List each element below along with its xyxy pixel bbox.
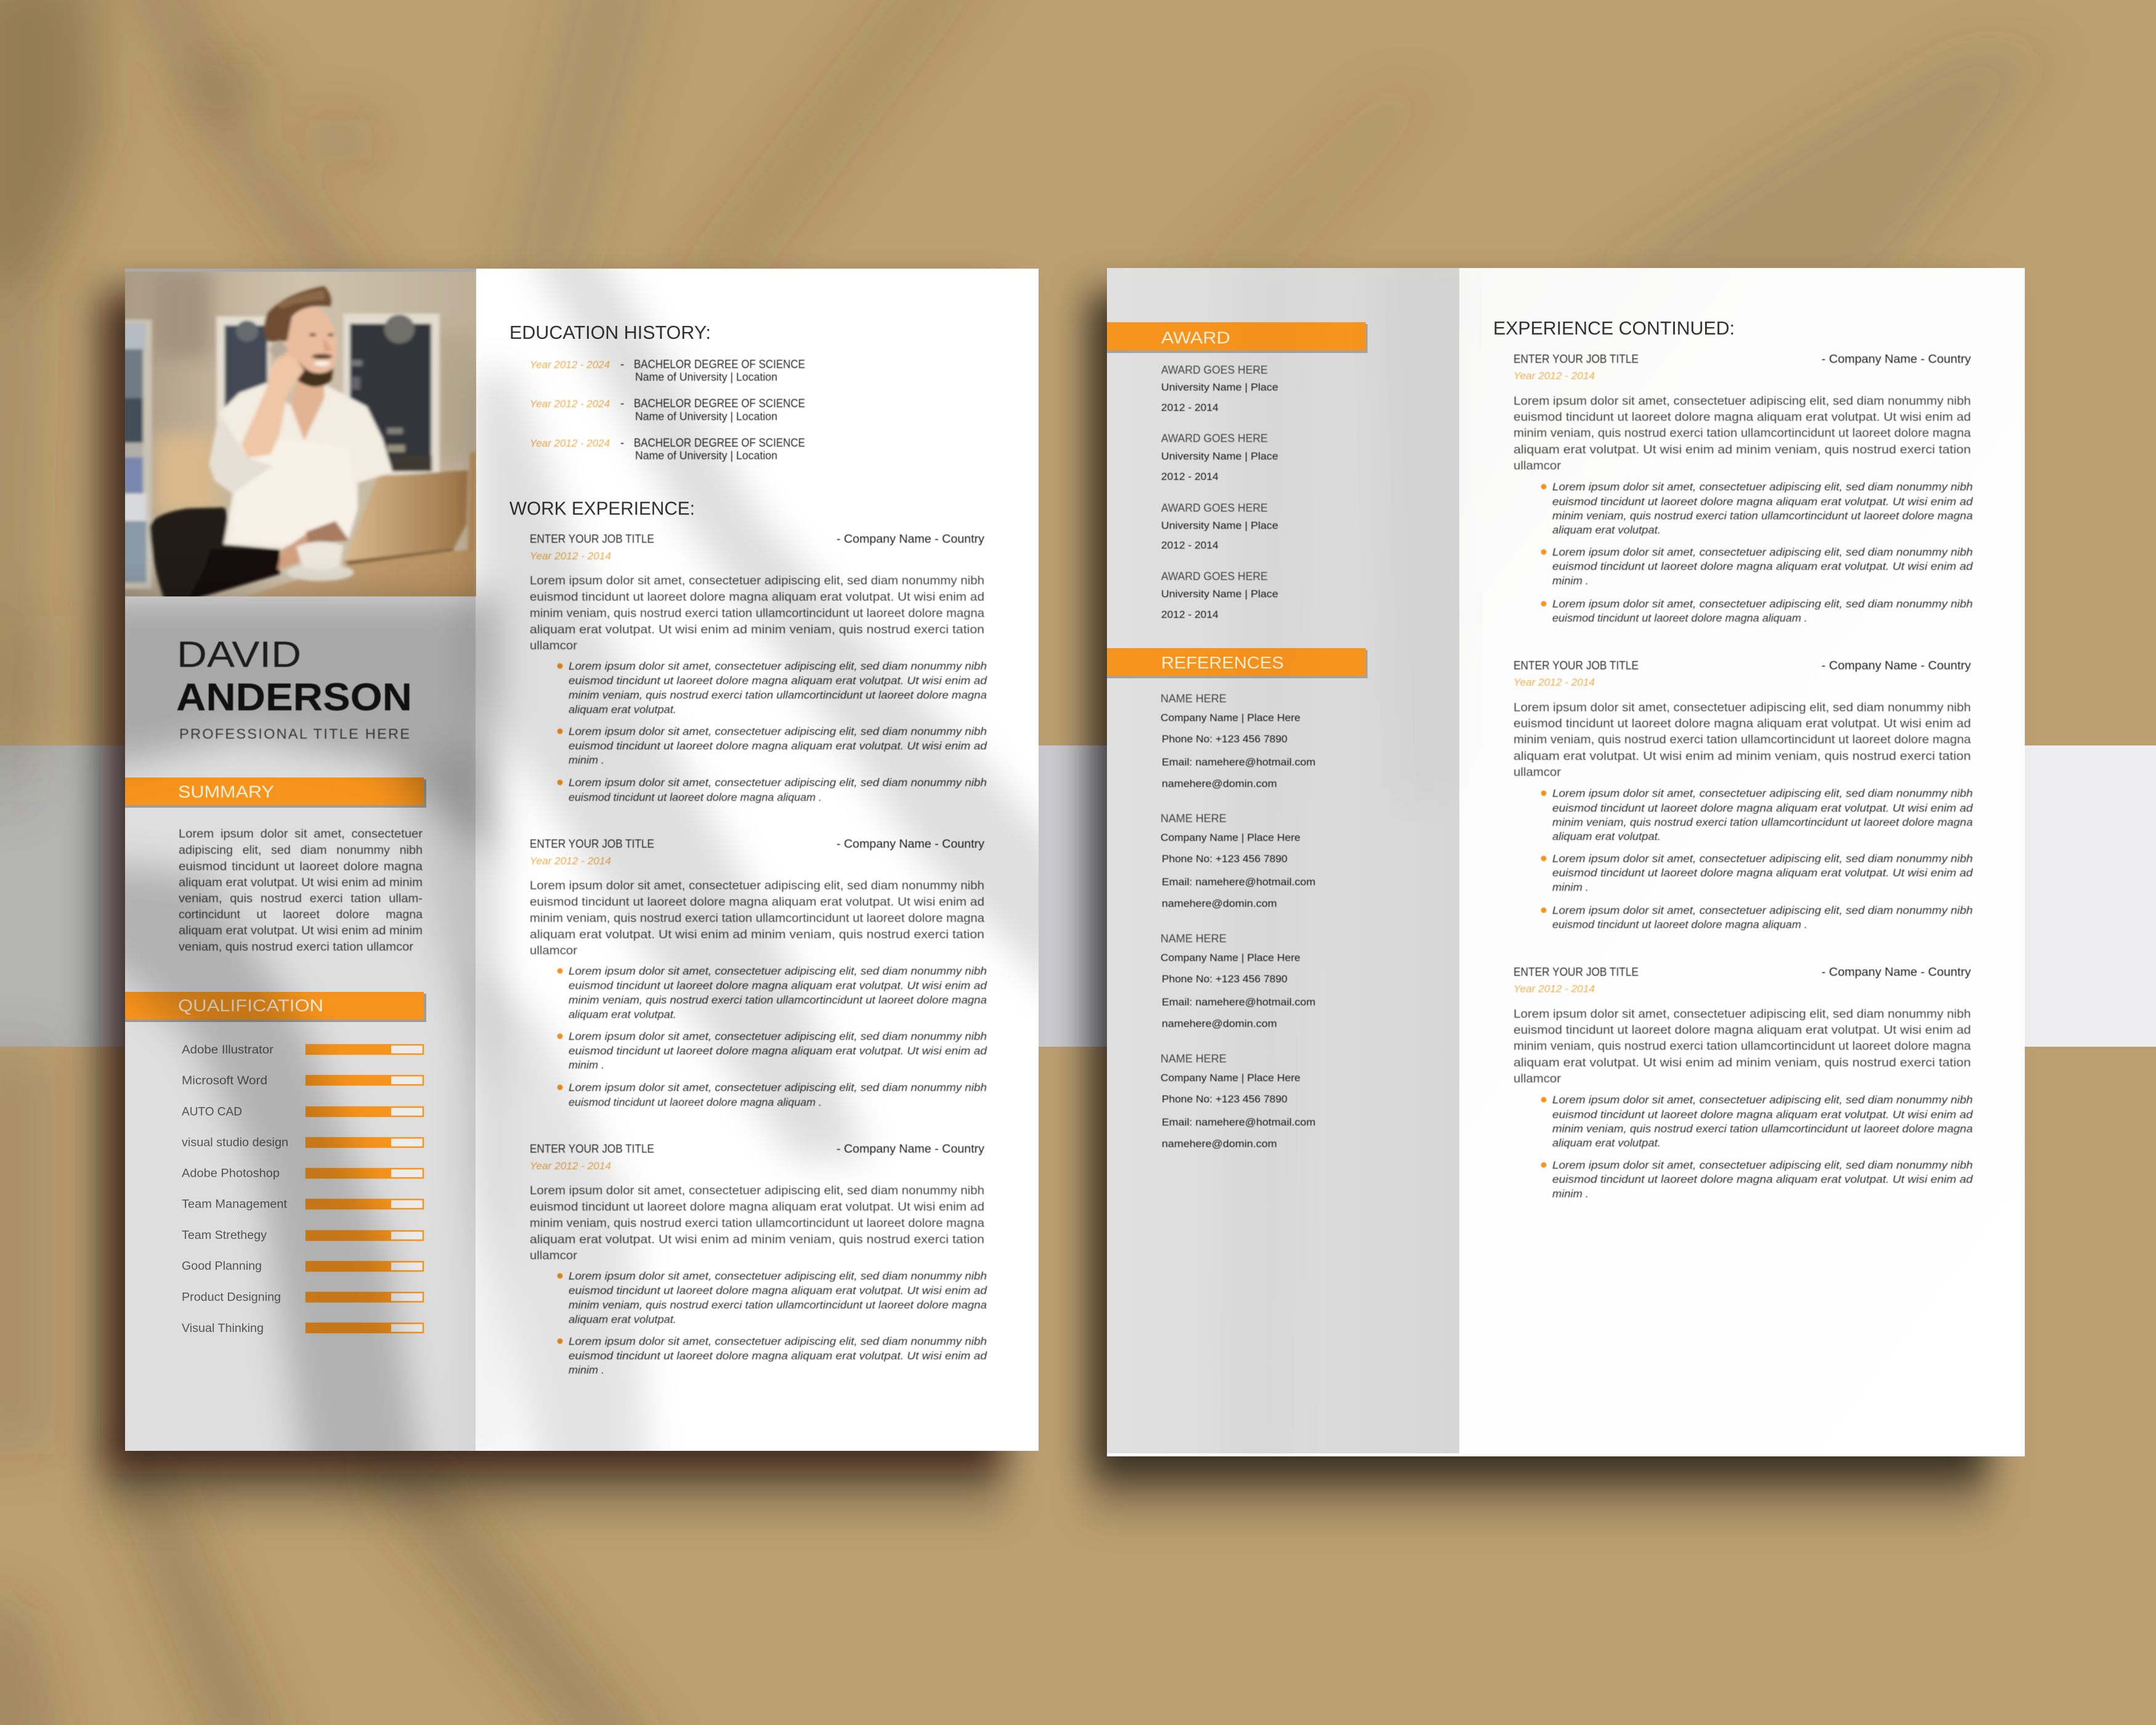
job entry 1	[530, 533, 987, 803]
job entry 5: - Company Name - Country	[1822, 659, 1971, 673]
job entry 2: ENTER YOUR JOB TITLE	[530, 838, 654, 851]
job entry 4: euismod tincidunt ut laoreet dolore magna aliquam erat volutpat. Ut wisi enim ad	[1552, 560, 1974, 572]
job entry 5: Year 2012 - 2014	[1514, 676, 1595, 688]
job entry 4: Lorem ipsum dolor sit amet, consectetuer adipiscing elit, sed diam nonummy nibh	[1552, 481, 1972, 493]
award entries: AWARD GOES HERE	[1161, 570, 1268, 583]
job entry 6: Year 2012 - 2014	[1514, 983, 1595, 995]
job entry 3: Lorem ipsum dolor sit amet, consectetuer adipiscing elit, sed diam nonummy nibh	[530, 1184, 984, 1198]
reference entries: namehere@domin.com	[1162, 1018, 1277, 1029]
award entries: AWARD GOES HERE	[1161, 363, 1268, 376]
education entries	[530, 357, 805, 462]
job entry 1: aliquam erat volutpat.	[569, 704, 676, 716]
job entry 1: euismod tincidunt ut laoreet dolore magna aliquam .	[569, 791, 822, 803]
job entry 2: - Company Name - Country	[837, 838, 985, 851]
award entries: University Name | Place	[1161, 589, 1278, 600]
summary text: euismod tincidunt ut laoreet dolore magna	[179, 859, 423, 873]
reference entries: Company Name | Place Here	[1161, 952, 1300, 964]
job entry 2: Lorem ipsum dolor sit amet, consectetuer adipiscing elit, sed diam nonummy nibh	[569, 1081, 987, 1094]
job entry 6: Lorem ipsum dolor sit amet, consectetuer adipiscing elit, sed diam nonummy nibh	[1552, 1159, 1972, 1171]
job entry 3: - Company Name - Country	[837, 1143, 985, 1156]
job entry 3: Lorem ipsum dolor sit amet, consectetuer adipiscing elit, sed diam nonummy nibh	[569, 1335, 987, 1347]
award entries: 2012 - 2014	[1161, 471, 1218, 482]
job entry 1: minim .	[569, 754, 604, 766]
job entry 4: euismod tincidunt ut laoreet dolore magna aliquam .	[1552, 612, 1807, 624]
section bar: award: AWARD	[1161, 328, 1230, 347]
reference entries: Company Name | Place Here	[1161, 712, 1300, 723]
job entry 3: ENTER YOUR JOB TITLE	[530, 1143, 654, 1156]
job entry 1: Lorem ipsum dolor sit amet, consectetuer adipiscing elit, sed diam nonummy nibh	[569, 725, 987, 737]
award entries: University Name | Place	[1161, 382, 1278, 393]
job entry 2: aliquam erat volutpat.	[569, 1008, 676, 1020]
job entry 2: Year 2012 - 2014	[530, 855, 611, 867]
section bar: summary	[125, 777, 426, 808]
summary text: veniam, quis nostrud exerci tation ullam-	[179, 891, 423, 905]
reference entries: Company Name | Place Here	[1161, 1073, 1300, 1084]
job entry 6: aliquam erat volutpat.	[1552, 1137, 1661, 1149]
job entry 3: Lorem ipsum dolor sit amet, consectetuer adipiscing elit, sed diam nonummy nibh	[569, 1270, 987, 1282]
reference entries	[1161, 692, 1316, 1150]
job entry 4: Year 2012 - 2014	[1514, 370, 1595, 382]
skill: Microsoft Word: Microsoft Word	[182, 1074, 267, 1087]
job entry 5: Lorem ipsum dolor sit amet, consectetuer adipiscing elit, sed diam nonummy nibh	[1552, 904, 1972, 917]
reference entries: namehere@domin.com	[1162, 1138, 1277, 1150]
job entry 5: euismod tincidunt ut laoreet dolore magna aliquam erat volutpat. Ut wisi enim ad	[1552, 802, 1974, 814]
job entry 1: Lorem ipsum dolor sit amet, consectetuer adipiscing elit, sed diam nonummy nibh	[569, 660, 987, 672]
award entries: AWARD GOES HERE	[1161, 432, 1268, 445]
summary text	[179, 827, 423, 954]
reference entries: Email: namehere@hotmail.com	[1162, 757, 1316, 768]
job entry 4: minim veniam, quis nostrud exerci tation ullamcortincidunt ut laoreet dolore magna	[1552, 509, 1973, 522]
section bar: references: REFERENCES	[1161, 653, 1284, 672]
job entry 3: euismod tincidunt ut laoreet dolore magna aliquam erat volutpat. Ut wisi enim ad	[569, 1349, 987, 1362]
summary text: Lorem ipsum dolor sit amet, consectetuer	[179, 827, 423, 840]
window-light shadows across page one	[125, 269, 1039, 1451]
job entry 2: minim .	[569, 1058, 604, 1071]
job entry 6: ENTER YOUR JOB TITLE	[1514, 966, 1639, 979]
reference entries: namehere@domin.com	[1162, 898, 1277, 909]
panel: resume page two	[1107, 259, 2025, 1479]
job entry 4: minim veniam, quis nostrud exerci tation ullamcortincidunt ut laoreet dolore magna	[1514, 426, 1971, 440]
reference entries: NAME HERE	[1161, 933, 1226, 945]
job entry 5: minim veniam, quis nostrud exerci tation ullamcortincidunt ut laoreet dolore magna	[1514, 733, 1971, 747]
job entry 4: euismod tincidunt ut laoreet dolore magna aliquam erat volutpat. Ut wisi enim ad	[1552, 495, 1974, 508]
education entries: Year 2012 - 2024	[530, 437, 610, 449]
award entries: 2012 - 2014	[1161, 540, 1218, 551]
job entry 2: minim veniam, quis nostrud exerci tation ullamcortincidunt ut laoreet dolore magna	[569, 994, 987, 1006]
job entry 2: minim veniam, quis nostrud exerci tation ullamcortincidunt ut laoreet dolore magna	[530, 912, 984, 925]
reference entries: Email: namehere@hotmail.com	[1162, 997, 1316, 1008]
photo: man on the phone at a laptop	[121, 269, 484, 604]
job entry 3: ullamcor	[530, 1249, 578, 1262]
job entry 6: Lorem ipsum dolor sit amet, consectetuer adipiscing elit, sed diam nonummy nibh	[1514, 1007, 1971, 1021]
job entry 6: minim .	[1552, 1188, 1589, 1200]
skill: Visual Thinking: Visual Thinking	[182, 1322, 264, 1335]
skill: Team Strethegy	[182, 1229, 423, 1242]
reference entries: Company Name | Place Here	[1161, 832, 1300, 843]
job entry 2: Lorem ipsum dolor sit amet, consectetuer adipiscing elit, sed diam nonummy nibh	[530, 879, 984, 893]
job entry 6: minim veniam, quis nostrud exerci tation ullamcortincidunt ut laoreet dolore magna	[1552, 1122, 1973, 1135]
education entries: Year 2012 - 2024	[530, 359, 610, 371]
job entry 1: ENTER YOUR JOB TITLE	[530, 533, 654, 546]
skill: Product Designing	[182, 1291, 423, 1304]
job entry 6	[1514, 966, 1974, 1200]
summary text: cortincidunt ut laoreet dolore magna	[179, 907, 423, 921]
page two white column	[1107, 268, 2025, 1456]
job entry 1: Lorem ipsum dolor sit amet, consectetuer adipiscing elit, sed diam nonummy nibh	[569, 776, 987, 789]
job entry 1: - Company Name - Country	[837, 533, 985, 546]
skill: Adobe Photoshop: Adobe Photoshop	[182, 1167, 280, 1180]
education entries: -	[620, 437, 624, 450]
page one grey sidebar	[125, 269, 476, 1451]
job entry 4: Lorem ipsum dolor sit amet, consectetuer adipiscing elit, sed diam nonummy nibh	[1552, 598, 1972, 610]
reference entries: Phone No: +123 456 7890	[1162, 734, 1287, 745]
job entry 3	[530, 1143, 987, 1376]
reference entries: NAME HERE	[1161, 813, 1226, 825]
skill: Good Planning	[182, 1260, 423, 1273]
job entry 1: Lorem ipsum dolor sit amet, consectetuer adipiscing elit, sed diam nonummy nibh	[530, 574, 984, 588]
skill list with progress bars	[182, 1044, 423, 1335]
reference entries: Phone No: +123 456 7890	[1162, 1094, 1287, 1105]
job entry 5: euismod tincidunt ut laoreet dolore magna aliquam erat volutpat. Ut wisi enim ad	[1514, 717, 1971, 731]
job entry 2: euismod tincidunt ut laoreet dolore magna aliquam erat volutpat. Ut wisi enim ad	[530, 895, 984, 909]
job entry 2: aliquam erat volutpat. Ut wisi enim ad minim veniam, quis nostrud exerci tation	[530, 928, 984, 941]
award entries: 2012 - 2014	[1161, 609, 1218, 620]
candidate name and title	[176, 635, 412, 742]
education entries: BACHELOR DEGREE OF SCIENCE	[634, 397, 805, 410]
skill: visual studio design	[182, 1136, 423, 1150]
skill: Adobe Illustrator: Adobe Illustrator	[182, 1044, 274, 1057]
education entries: BACHELOR DEGREE OF SCIENCE	[634, 357, 805, 371]
job entry 3: euismod tincidunt ut laoreet dolore magna aliquam erat volutpat. Ut wisi enim ad	[569, 1284, 987, 1296]
page one white column	[125, 269, 1039, 1451]
education entries: Year 2012 - 2024	[530, 398, 610, 410]
drop shadows under the pages	[102, 293, 1988, 1516]
job entry 4: aliquam erat volutpat.	[1552, 524, 1661, 536]
job entry 5: ENTER YOUR JOB TITLE	[1514, 659, 1639, 673]
job entry 2: Lorem ipsum dolor sit amet, consectetuer adipiscing elit, sed diam nonummy nibh	[569, 965, 987, 977]
reference entries: Phone No: +123 456 7890	[1162, 973, 1287, 984]
job entry 5: Lorem ipsum dolor sit amet, consectetuer adipiscing elit, sed diam nonummy nibh	[1514, 701, 1971, 715]
job entry 1: minim veniam, quis nostrud exerci tation ullamcortincidunt ut laoreet dolore magna	[530, 606, 984, 620]
skill: Team Strethegy: Team Strethegy	[182, 1229, 267, 1242]
reference entries: NAME HERE	[1161, 1052, 1226, 1065]
job entry 4: Lorem ipsum dolor sit amet, consectetuer adipiscing elit, sed diam nonummy nibh	[1552, 546, 1972, 558]
job entry 2: Lorem ipsum dolor sit amet, consectetuer adipiscing elit, sed diam nonummy nibh	[569, 1030, 987, 1042]
skill: Team Management	[182, 1198, 423, 1211]
section bar: references	[1107, 648, 1368, 678]
job entry 1: euismod tincidunt ut laoreet dolore magna aliquam erat volutpat. Ut wisi enim ad	[569, 739, 987, 752]
candidate name and title: PROFESSIONAL TITLE HERE	[179, 726, 410, 742]
job entry 5: aliquam erat volutpat. Ut wisi enim ad minim veniam, quis nostrud exerci tation	[1514, 749, 1971, 763]
job entry 1: Year 2012 - 2014	[530, 550, 611, 562]
job entry 6: euismod tincidunt ut laoreet dolore magna aliquam erat volutpat. Ut wisi enim ad	[1552, 1173, 1974, 1185]
job entry 5: ullamcor	[1514, 765, 1562, 779]
job entry 2: euismod tincidunt ut laoreet dolore magna aliquam .	[569, 1096, 822, 1108]
job entry 4: euismod tincidunt ut laoreet dolore magna aliquam erat volutpat. Ut wisi enim ad	[1514, 410, 1971, 424]
job entry 2: ullamcor	[530, 944, 578, 957]
skill: Good Planning: Good Planning	[182, 1260, 262, 1273]
job entry 6: euismod tincidunt ut laoreet dolore magna aliquam erat volutpat. Ut wisi enim ad	[1514, 1023, 1971, 1037]
education entries: Name of University | Location	[635, 371, 777, 383]
job entry 5: Lorem ipsum dolor sit amet, consectetuer adipiscing elit, sed diam nonummy nibh	[1552, 787, 1972, 800]
job entry 6: aliquam erat volutpat. Ut wisi enim ad minim veniam, quis nostrud exerci tation	[1514, 1056, 1971, 1070]
job entry 4	[1514, 353, 1974, 624]
skill: visual studio design: visual studio design	[182, 1136, 288, 1150]
heading: work experience: WORK EXPERIENCE:	[509, 498, 695, 519]
job entry 5	[1514, 659, 1974, 930]
award entries: University Name | Place	[1161, 451, 1278, 462]
job entry 1: minim veniam, quis nostrud exerci tation ullamcortincidunt ut laoreet dolore magna	[569, 689, 987, 701]
job entry 1: ullamcor	[530, 639, 578, 652]
job entry 3: aliquam erat volutpat. Ut wisi enim ad minim veniam, quis nostrud exerci tation	[530, 1233, 984, 1246]
section bar: award	[1107, 322, 1368, 353]
summary text: veniam, quis nostrud exerci tation ullamcor	[179, 940, 414, 954]
skill: AUTO CAD: AUTO CAD	[182, 1105, 242, 1119]
heading: education history: EDUCATION HISTORY:	[509, 322, 711, 343]
job entry 1: euismod tincidunt ut laoreet dolore magna aliquam erat volutpat. Ut wisi enim ad	[569, 674, 987, 686]
heading: experience continued: EXPERIENCE CONTINUED:	[1493, 317, 1735, 339]
reference entries: Email: namehere@hotmail.com	[1162, 877, 1316, 888]
faint shadows across page two	[1220, 259, 1459, 1479]
job entry 4: - Company Name - Country	[1822, 353, 1971, 366]
job entry 6: Lorem ipsum dolor sit amet, consectetuer adipiscing elit, sed diam nonummy nibh	[1552, 1094, 1972, 1106]
job entry 4: aliquam erat volutpat. Ut wisi enim ad minim veniam, quis nostrud exerci tation	[1514, 443, 1971, 457]
summary text: adipiscing elit, sed diam nonummy nibh	[179, 843, 423, 857]
job entry 5: aliquam erat volutpat.	[1552, 830, 1661, 843]
skill: Product Designing: Product Designing	[182, 1291, 281, 1304]
section bar: summary: SUMMARY	[178, 782, 274, 801]
reference entries: namehere@domin.com	[1162, 779, 1277, 790]
skill: Visual Thinking	[182, 1322, 423, 1335]
job entry 4: minim .	[1552, 574, 1589, 586]
award entries	[1161, 363, 1278, 620]
job entry 2: euismod tincidunt ut laoreet dolore magna aliquam erat volutpat. Ut wisi enim ad	[569, 1045, 987, 1057]
education entries: Name of University | Location	[635, 410, 777, 423]
skill: Adobe Illustrator	[182, 1044, 423, 1057]
job entry 4: ENTER YOUR JOB TITLE	[1514, 353, 1639, 366]
education entries: BACHELOR DEGREE OF SCIENCE	[634, 436, 805, 450]
job entry 5: euismod tincidunt ut laoreet dolore magna aliquam erat volutpat. Ut wisi enim ad	[1552, 866, 1974, 879]
summary text: aliquam erat volutpat. Ut wisi enim ad minim	[179, 875, 423, 889]
job entry 6: euismod tincidunt ut laoreet dolore magna aliquam erat volutpat. Ut wisi enim ad	[1552, 1108, 1974, 1121]
panel: resume page one	[125, 269, 1039, 1451]
background: white horizontal band	[0, 745, 2156, 1047]
candidate name and title: DAVID	[177, 635, 301, 675]
skill: Adobe Photoshop	[182, 1167, 423, 1180]
skill: AUTO CAD	[182, 1105, 423, 1119]
skill: Team Management: Team Management	[182, 1198, 288, 1211]
reference entries: Phone No: +123 456 7890	[1162, 854, 1287, 865]
section bar: qualification: QUALIFICATION	[178, 996, 323, 1015]
job entry 3: euismod tincidunt ut laoreet dolore magna aliquam erat volutpat. Ut wisi enim ad	[530, 1200, 984, 1214]
job entry 2: euismod tincidunt ut laoreet dolore magna aliquam erat volutpat. Ut wisi enim ad	[569, 980, 987, 992]
job entry 1: euismod tincidunt ut laoreet dolore magna aliquam erat volutpat. Ut wisi enim ad	[530, 590, 984, 604]
job entry 6: minim veniam, quis nostrud exerci tation ullamcortincidunt ut laoreet dolore magna	[1514, 1039, 1971, 1053]
job entry 6: - Company Name - Country	[1822, 966, 1971, 979]
job entry 3: minim veniam, quis nostrud exerci tation ullamcortincidunt ut laoreet dolore magna	[530, 1216, 984, 1230]
education entries: Name of University | Location	[635, 450, 777, 462]
section bar: qualification	[125, 992, 426, 1022]
award entries: AWARD GOES HERE	[1161, 501, 1268, 514]
job entry 5: euismod tincidunt ut laoreet dolore magna aliquam .	[1552, 918, 1807, 930]
job entry 2	[530, 838, 987, 1108]
job entry 3: minim veniam, quis nostrud exerci tation ullamcortincidunt ut laoreet dolore magna	[569, 1299, 987, 1311]
job entry 4: ullamcor	[1514, 459, 1562, 473]
education entries: -	[620, 397, 624, 410]
reference entries: Email: namehere@hotmail.com	[1162, 1117, 1316, 1128]
job entry 5: Lorem ipsum dolor sit amet, consectetuer adipiscing elit, sed diam nonummy nibh	[1552, 853, 1972, 865]
job entry 4: Lorem ipsum dolor sit amet, consectetuer adipiscing elit, sed diam nonummy nibh	[1514, 394, 1971, 408]
award entries: University Name | Place	[1161, 520, 1278, 531]
job entry 1: aliquam erat volutpat. Ut wisi enim ad minim veniam, quis nostrud exerci tation	[530, 623, 984, 636]
job entry 3: minim .	[569, 1364, 604, 1376]
job entry 5: minim .	[1552, 881, 1589, 893]
job entry 6: ullamcor	[1514, 1072, 1562, 1086]
summary text: aliquam erat volutpat. Ut wisi enim ad minim	[179, 923, 423, 937]
reference entries: NAME HERE	[1161, 692, 1226, 705]
page two grey sidebar	[1107, 268, 1459, 1453]
award entries: 2012 - 2014	[1161, 402, 1218, 413]
skill: Microsoft Word	[182, 1074, 423, 1087]
candidate name and title: ANDERSON	[176, 676, 412, 719]
education entries: -	[620, 359, 624, 371]
job entry 5: minim veniam, quis nostrud exerci tation ullamcortincidunt ut laoreet dolore magna	[1552, 816, 1973, 828]
job entry 3: aliquam erat volutpat.	[569, 1313, 676, 1326]
job entry 3: Year 2012 - 2014	[530, 1160, 611, 1172]
